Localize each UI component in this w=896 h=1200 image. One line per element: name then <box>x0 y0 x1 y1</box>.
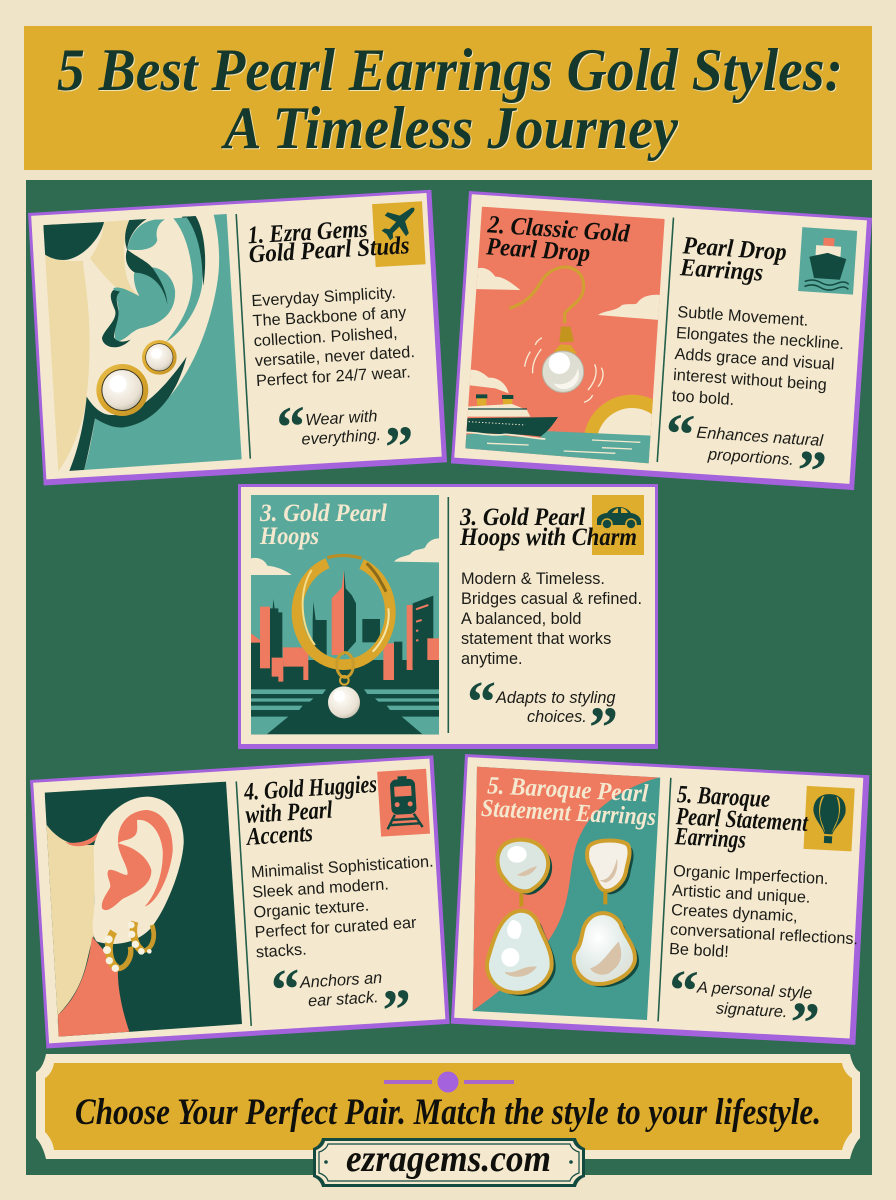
art title <box>480 772 658 831</box>
illustration: ear with huggies <box>42 780 247 1040</box>
body text: A balanced, bold <box>461 610 581 628</box>
body text: collection. Polished, <box>253 324 398 350</box>
quote <box>467 669 618 760</box>
card heading: Accents <box>244 820 314 851</box>
card heading: 3. Gold Pearl <box>459 504 585 531</box>
quote: “ <box>667 957 700 1023</box>
body text: Organic Imperfection. <box>673 862 829 888</box>
pearl <box>542 351 584 392</box>
card heading: with Pearl <box>245 797 333 829</box>
body text: Artistic and unique. <box>672 882 811 907</box>
body text: Elongates the neckline. <box>675 324 845 353</box>
motion swooshes <box>525 338 603 402</box>
website text: ezragems.com <box>346 1138 551 1180</box>
card heading: Pearl Statement <box>675 803 809 837</box>
stamp: train <box>377 769 430 837</box>
body text: interest without being <box>673 366 827 394</box>
body text: Modern & Timeless. <box>461 570 605 588</box>
quote: ear stack. <box>307 988 379 1010</box>
art title: Hoops <box>259 523 319 550</box>
quote <box>661 401 830 504</box>
body text: stacks. <box>255 940 307 962</box>
card heading: Gold Pearl Studs <box>248 232 410 268</box>
card heading: Earrings <box>679 254 764 287</box>
card 2: Classic Gold Pearl Drop <box>450 191 872 490</box>
sun ring <box>584 394 653 464</box>
body text: Be bold! <box>669 940 729 961</box>
sea <box>462 431 652 465</box>
card heading <box>242 771 380 851</box>
card heading <box>247 213 410 268</box>
charm ring <box>337 653 353 677</box>
skyline <box>251 570 439 734</box>
stamp: hot air balloon <box>804 786 855 851</box>
body text: Subtle Movement. <box>677 303 809 330</box>
card heading: Earrings <box>673 823 747 854</box>
stamp: ship <box>798 227 857 295</box>
ornament <box>384 1072 514 1092</box>
title <box>57 37 843 161</box>
pearl charm <box>328 676 360 718</box>
green background panel <box>26 180 872 1175</box>
quote: ” <box>795 437 828 504</box>
body text: too bold. <box>671 387 735 409</box>
card 5: Baroque Pearl Statement Earrings <box>448 754 869 1058</box>
quote: A personal style <box>696 978 813 1002</box>
body text: conversational reflections. <box>670 920 859 948</box>
huggie earrings <box>103 922 154 972</box>
card heading: 1. Ezra Gems <box>247 216 368 249</box>
ear <box>93 797 184 944</box>
quote: Adapts to styling <box>495 689 615 707</box>
body text: Perfect for curated ear <box>254 914 418 942</box>
header banner <box>24 26 872 170</box>
body text: anytime. <box>461 650 523 668</box>
card 1: Ezra Gems Gold Pearl Studs <box>25 187 448 500</box>
quote: proportions. <box>706 445 794 469</box>
body text: Perfect for 24/7 wear. <box>256 363 411 390</box>
body text: The Backbone of any <box>252 303 408 330</box>
left earring <box>487 840 556 996</box>
title: 5 Best Pearl Earrings Gold Styles: <box>57 37 843 103</box>
body text <box>669 862 862 968</box>
quote: Enhances natural <box>696 424 824 450</box>
body text <box>251 853 439 962</box>
art title: 2. Classic Gold <box>486 211 631 248</box>
body text: Minimalist Sophistication. <box>251 853 434 882</box>
illustration: hoop and skyline <box>251 495 439 734</box>
quote: ” <box>383 413 416 480</box>
body text: versatile, never dated. <box>254 343 415 370</box>
quote: “ <box>269 956 302 1023</box>
card heading: 5. Baroque <box>676 781 771 813</box>
card heading: Pearl Drop <box>681 232 788 266</box>
body text: Adds grace and visual <box>674 345 835 374</box>
card heading <box>673 781 811 857</box>
card heading <box>459 504 637 551</box>
card heading: 4. Gold Huggies <box>243 771 378 806</box>
art title <box>485 211 631 270</box>
card 4: Gold Huggies with Pearl Accents <box>26 755 451 1064</box>
gold hoop <box>297 555 390 665</box>
card heading: Hoops with Charm <box>459 524 637 551</box>
small pearl stud <box>142 340 177 375</box>
body text: Bridges casual & refined. <box>461 590 642 608</box>
quote <box>269 949 414 1050</box>
stamp: airplane <box>372 201 426 267</box>
quote: choices. <box>527 708 587 726</box>
art title: Pearl Drop <box>485 233 591 267</box>
illustration: baroque earrings <box>462 765 667 1023</box>
art title: Statement Earrings <box>480 795 657 831</box>
quote: signature. <box>716 999 788 1021</box>
body text: Sleek and modern. <box>252 875 389 902</box>
quote: Anchors an <box>298 969 383 992</box>
body text: Everyday Simplicity. <box>251 284 396 310</box>
quote: everything. <box>301 426 382 449</box>
stamp: car <box>592 495 644 555</box>
website plaque <box>313 1138 585 1187</box>
right earring <box>574 840 639 987</box>
body text: Creates dynamic, <box>671 901 798 926</box>
body text <box>461 570 642 668</box>
card 3: Gold Pearl Hoops with Charm <box>238 484 658 760</box>
card heading <box>679 232 788 288</box>
art title: 5. Baroque Pearl <box>487 772 649 808</box>
quote: “ <box>275 393 308 460</box>
quote: ” <box>789 989 821 1056</box>
quote: “ <box>467 669 496 734</box>
gold hook <box>509 267 584 323</box>
art title: 3. Gold Pearl <box>259 500 387 527</box>
quote: Wear with <box>305 407 378 429</box>
quote: ” <box>381 976 414 1043</box>
body text: Organic texture. <box>253 897 370 922</box>
quote <box>275 387 416 486</box>
ocean liner <box>462 394 558 439</box>
body text <box>671 303 846 416</box>
body text <box>251 283 417 390</box>
quote: “ <box>663 401 696 467</box>
quote: ” <box>589 695 618 760</box>
quote <box>666 957 822 1056</box>
title: A Timeless Journey <box>220 95 678 161</box>
big pearl stud <box>96 364 148 416</box>
art title <box>259 500 387 550</box>
illustration: pearl drop with ship <box>465 206 665 464</box>
body text: statement that works <box>461 630 611 648</box>
illustration: ear with pearl studs <box>40 210 245 475</box>
footer banner <box>36 1054 860 1159</box>
